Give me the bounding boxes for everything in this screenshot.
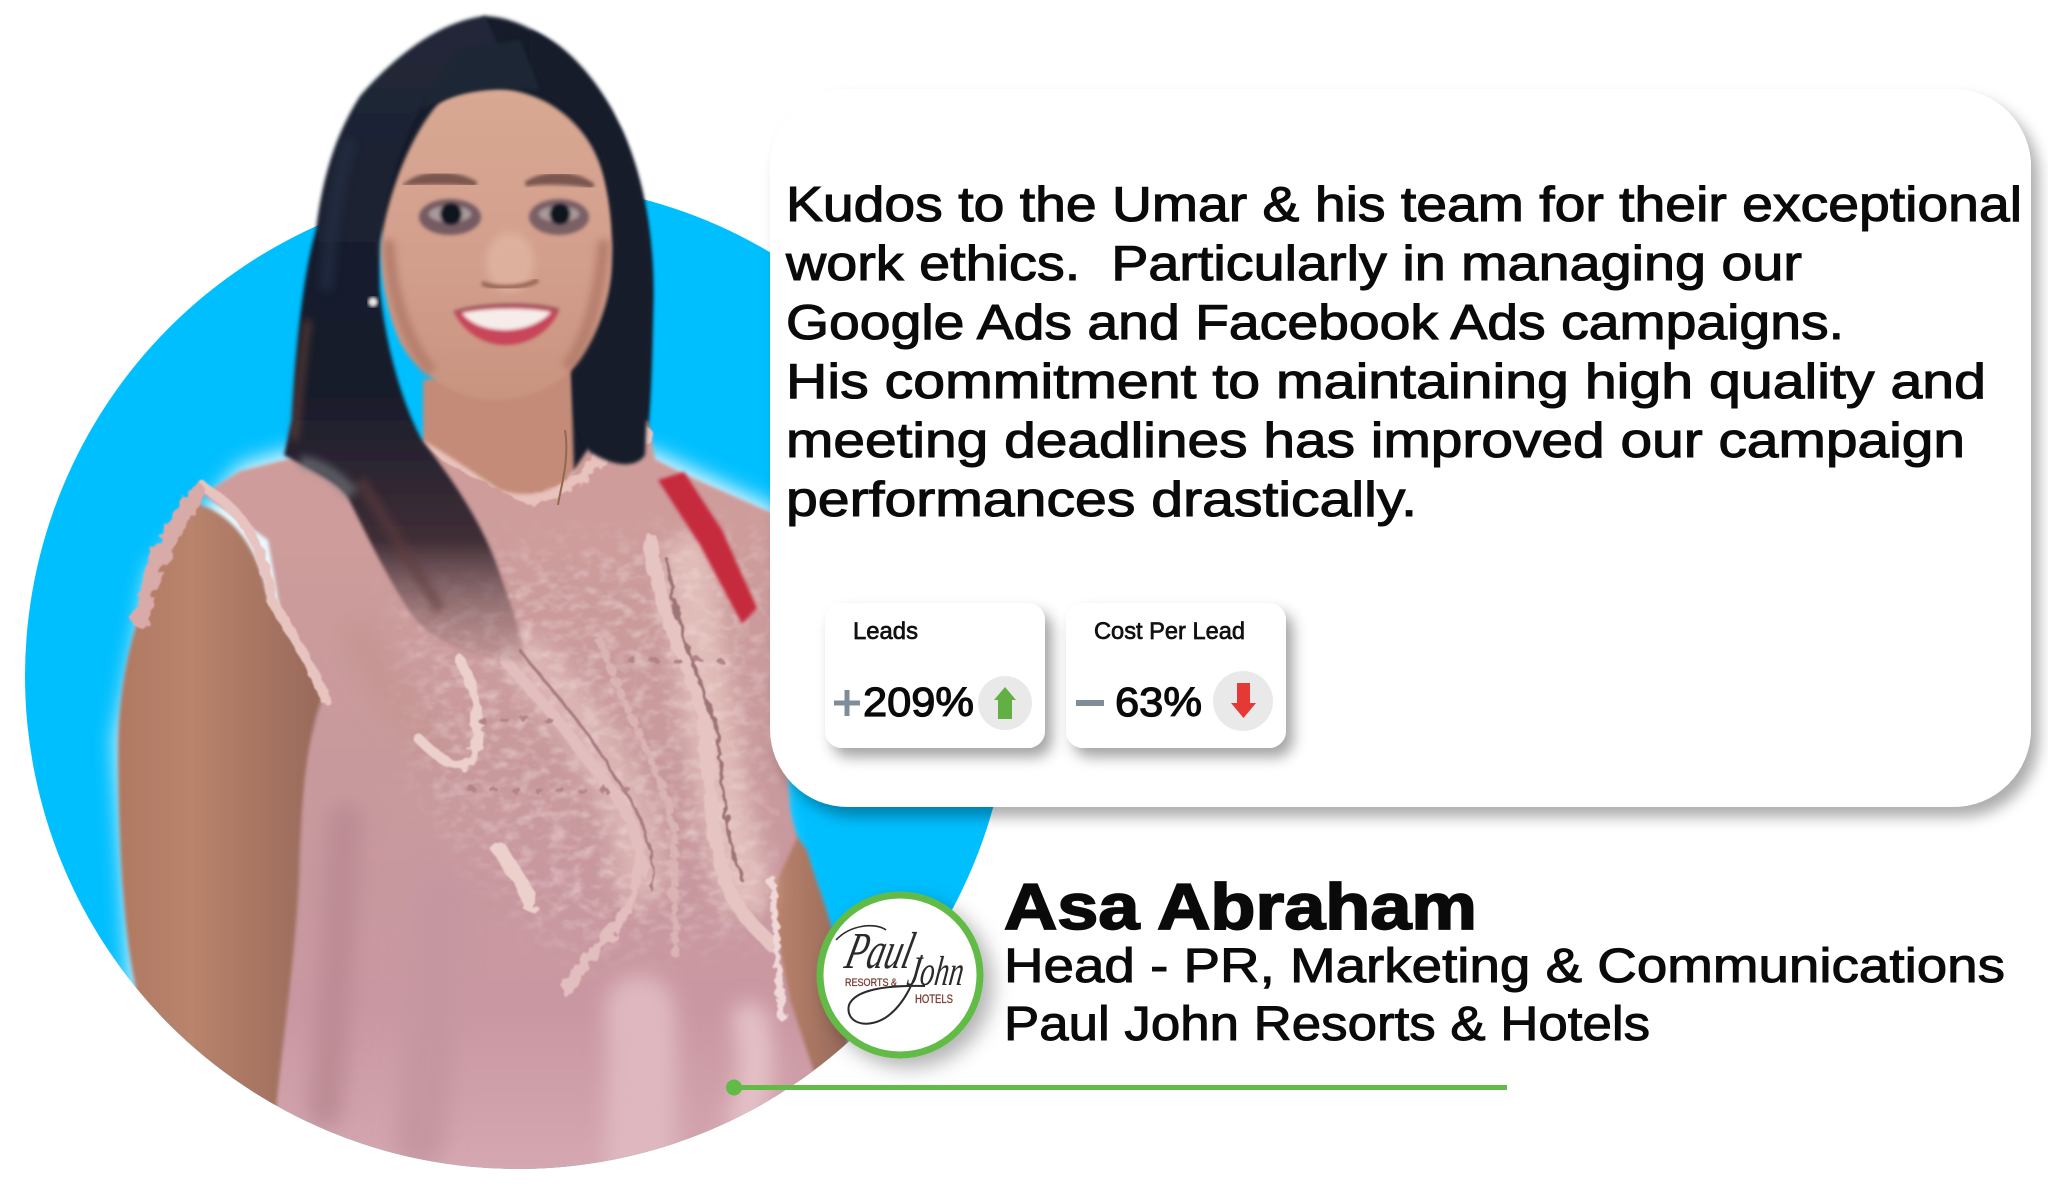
dress mottled lace texture (400, 532, 780, 954)
metric card: cost per lead (1066, 603, 1286, 748)
face (381, 88, 612, 400)
her right arm (115, 502, 322, 1106)
cost per lead label: Cost Per Lead (1094, 618, 1245, 645)
attribution (1004, 870, 2005, 1051)
left eye (419, 199, 481, 235)
quote text (785, 178, 2022, 527)
light halo around figure (115, 450, 850, 1100)
company logo badge (820, 895, 980, 1055)
necklace (558, 430, 566, 505)
logo wordmark: Paul (839, 923, 920, 980)
green underline with dot (726, 1080, 1507, 1096)
dress tonal patches (325, 560, 755, 1170)
job title: Head - PR, Marketing & Communications (1004, 940, 2005, 993)
plus sign (834, 690, 860, 716)
logo wordmark: RESORTS & (845, 977, 898, 989)
nose shadow (482, 280, 538, 287)
her left arm (708, 830, 849, 1131)
sleeve ruffle (140, 488, 326, 700)
company name: Paul John Resorts & Hotels (1004, 998, 1650, 1051)
icon: up arrow (978, 676, 1032, 730)
icon: down arrow (1213, 671, 1273, 731)
quote text: Google Ads and Facebook Ads campaigns. (786, 296, 1844, 350)
minus sign (1076, 700, 1104, 706)
left eyebrow (409, 175, 476, 184)
hair right of face (530, 30, 652, 464)
quote text: His commitment to maintaining high quality and (786, 355, 1986, 409)
logo wordmark: HOTELS (915, 994, 953, 1006)
portrait of Asa Abraham (60, 16, 850, 1188)
quote text: meeting deadlines has improved our campaign (786, 414, 1965, 468)
leads value: 209% (863, 679, 974, 725)
person name: Asa Abraham (1004, 870, 1477, 943)
metric card: leads (825, 603, 1045, 748)
hair highlights (294, 140, 440, 610)
right eyebrow (526, 175, 593, 186)
quote text: performances drastically. (786, 473, 1417, 527)
right eye (529, 199, 589, 235)
testimonial card (770, 89, 2031, 807)
quote text: Kudos to the Umar & his team for their exceptional (786, 178, 2022, 232)
logo circle (820, 895, 980, 1055)
hairline part (426, 42, 538, 106)
cost per lead value: 63% (1115, 679, 1202, 725)
hair behind head (372, 16, 653, 470)
nose (486, 232, 534, 292)
blue background circle (25, 183, 1011, 1169)
cheek shading (388, 240, 604, 372)
quote text: work ethics. Particularly in managing our (785, 237, 1802, 291)
card background (770, 89, 2031, 807)
smile (454, 305, 559, 345)
long front hair lock (284, 16, 525, 662)
dress lace and ruffles (420, 427, 782, 1020)
logo wordmark (836, 923, 967, 1024)
red bag strap (658, 472, 757, 624)
earring (368, 297, 378, 307)
leads label: Leads (853, 618, 918, 645)
dress (200, 418, 815, 1169)
neck (423, 360, 574, 494)
logo wordmark: John (905, 948, 967, 995)
